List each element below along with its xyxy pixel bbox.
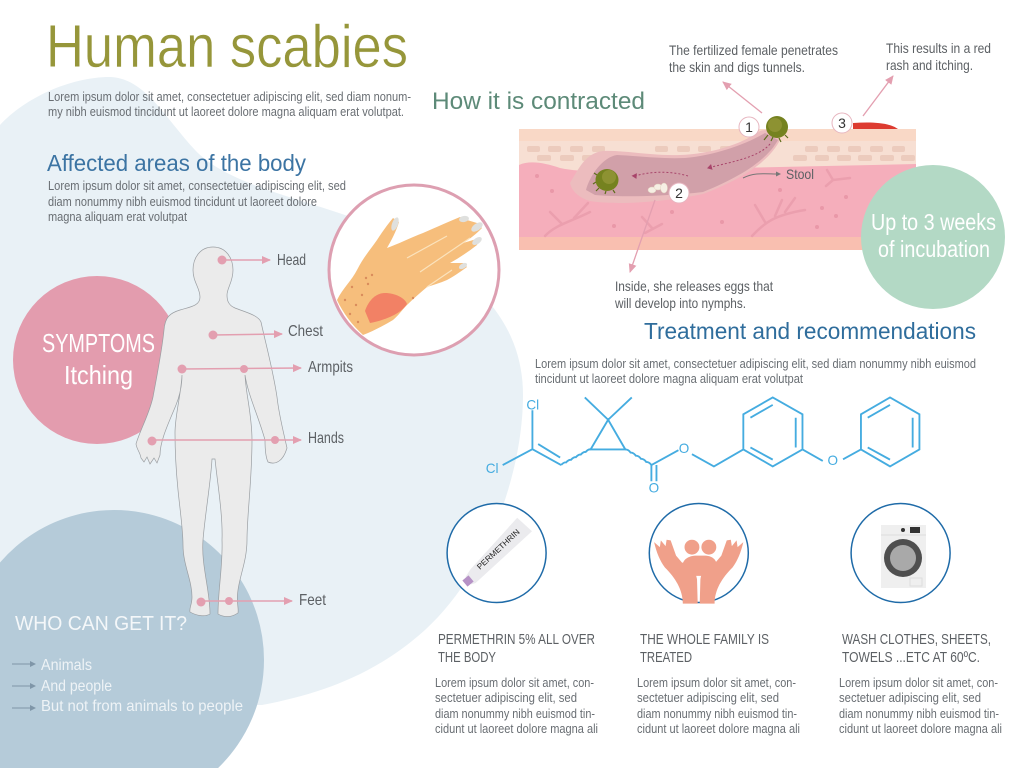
heading: affected areas: Affected areas of the body xyxy=(47,150,306,176)
mite 1 xyxy=(764,116,788,142)
column: washing: sectetuer adipiscing elit, sed xyxy=(839,691,981,705)
mite 2 xyxy=(593,169,618,194)
column: permethrin: PERMETHRIN 5% ALL OVER xyxy=(438,631,595,648)
incubation circle: of incubation xyxy=(878,236,990,262)
affected areas text: magna aliquam erat volutpat xyxy=(48,210,187,224)
who can get it circle xyxy=(0,510,264,768)
symptoms label: Itching xyxy=(64,360,133,390)
step 3 xyxy=(832,113,852,133)
body markers and labels xyxy=(148,252,353,609)
marker: chest xyxy=(208,323,323,340)
column: family: cidunt ut laoreet dolore magna ali xyxy=(637,722,800,736)
column: family: sectetuer adipiscing elit, sed xyxy=(637,691,779,705)
marker: feet: Feet xyxy=(299,592,326,609)
permethrin molecule: O xyxy=(649,481,659,496)
symptoms circle xyxy=(13,276,181,444)
incubation circle: Up to 3 weeks xyxy=(871,209,996,235)
column: washing: cidunt ut laoreet dolore magna ali xyxy=(839,722,1002,736)
stool label: Stool xyxy=(786,166,814,182)
step 3: 3 xyxy=(838,115,846,131)
who can get it text: But not from animals to people xyxy=(41,698,243,715)
title: Human scabies xyxy=(46,13,408,80)
column: family: TREATED xyxy=(640,649,692,666)
column: family: THE WHOLE FAMILY IS xyxy=(640,631,769,648)
column: permethrin xyxy=(435,631,598,736)
column: family: diam nonummy nibh euismod tin- xyxy=(637,707,797,721)
permethrin molecule xyxy=(486,397,919,496)
column: permethrin: THE BODY xyxy=(438,649,496,666)
marker: head xyxy=(218,252,306,269)
column: permethrin: Lorem ipsum dolor sit amet, con- xyxy=(435,676,594,690)
rash xyxy=(853,123,898,129)
intro text xyxy=(48,90,411,119)
icon: family in hands xyxy=(649,504,748,604)
marker: hands: Hands xyxy=(308,430,344,447)
tunnel path arrows xyxy=(635,144,770,178)
marker: armpits xyxy=(178,359,353,376)
step badges xyxy=(669,113,852,203)
permethrin molecule: Cl xyxy=(526,397,539,412)
permethrin molecule: O xyxy=(827,453,838,468)
treatment text: tincidunt ut laoreet dolore magna aliquam erat volutpat xyxy=(535,372,803,386)
step 1: 1 xyxy=(745,119,753,135)
callout arrows xyxy=(630,76,893,272)
step 2 xyxy=(669,183,689,203)
who can get it text: And people xyxy=(41,678,112,695)
skin cross-section xyxy=(519,129,916,250)
icon: washing machine xyxy=(851,504,950,602)
permethrin molecule: Cl xyxy=(486,461,499,476)
column: washing: diam nonummy nibh euismod tin- xyxy=(839,707,999,721)
marker: head: Head xyxy=(277,252,306,269)
treatment text xyxy=(535,357,976,386)
affected areas text xyxy=(48,179,346,224)
column: washing xyxy=(839,631,1002,736)
step 2: 2 xyxy=(675,185,683,201)
affected areas text: Lorem ipsum dolor sit amet, consectetuer adipiscing elit, sed xyxy=(48,179,346,193)
who can get it text: Animals xyxy=(41,657,92,674)
affected areas text: diam nonummy nibh euismod tincidunt ut laoreet dolore xyxy=(48,195,317,209)
symptoms label: SYMPTOMS xyxy=(42,328,155,358)
who can get it text xyxy=(12,613,243,715)
treatment text: Lorem ipsum dolor sit amet, consectetuer adipiscing elit, sed diam nonummy nibh euismod xyxy=(535,357,976,371)
column: washing: TOWELS ...ETC AT 60ºC. xyxy=(842,649,980,666)
callout texts: rash and itching. xyxy=(886,57,973,73)
body silhouette xyxy=(136,247,287,617)
background blob xyxy=(0,77,523,705)
who can get it text: WHO CAN GET IT? xyxy=(15,613,187,635)
step 1 xyxy=(739,117,759,137)
hand inset xyxy=(329,185,499,355)
incubation circle xyxy=(861,165,1005,309)
column: permethrin: sectetuer adipiscing elit, sed xyxy=(435,691,577,705)
column: washing: Lorem ipsum dolor sit amet, con- xyxy=(839,676,998,690)
stool label xyxy=(743,166,814,182)
marker: chest: Chest xyxy=(288,323,323,340)
intro text: my nibh euismod tincidunt ut laoreet dolore magna aliquam erat volutpat. xyxy=(48,105,404,119)
column: permethrin: cidunt ut laoreet dolore magna ali xyxy=(435,722,598,736)
callout texts: will develop into nymphs. xyxy=(614,295,746,311)
callout texts: the skin and digs tunnels. xyxy=(669,59,805,75)
icon: permethrin tube xyxy=(447,504,546,602)
callout texts xyxy=(614,40,991,311)
marker: armpits: Armpits xyxy=(308,359,353,376)
symptoms label xyxy=(42,328,155,390)
column: family: Lorem ipsum dolor sit amet, con- xyxy=(637,676,796,690)
eggs xyxy=(648,183,668,193)
callout texts: The fertilized female penetrates xyxy=(669,42,838,58)
heading: treatment: Treatment and recommendations xyxy=(644,318,976,344)
intro text: Lorem ipsum dolor sit amet, consectetuer adipiscing elit, sed diam nonum- xyxy=(48,90,411,104)
marker: hands xyxy=(148,430,344,447)
permethrin molecule: O xyxy=(679,441,689,456)
icon: permethrin tube: PERMETHRIN xyxy=(475,527,522,571)
marker: feet xyxy=(196,592,326,609)
column: permethrin: diam nonummy nibh euismod tin- xyxy=(435,707,595,721)
callout texts: Inside, she releases eggs that xyxy=(615,278,773,294)
column: family xyxy=(637,631,800,736)
heading: how it is contracted: How it is contracted xyxy=(432,88,645,115)
callout texts: This results in a red xyxy=(886,40,991,56)
